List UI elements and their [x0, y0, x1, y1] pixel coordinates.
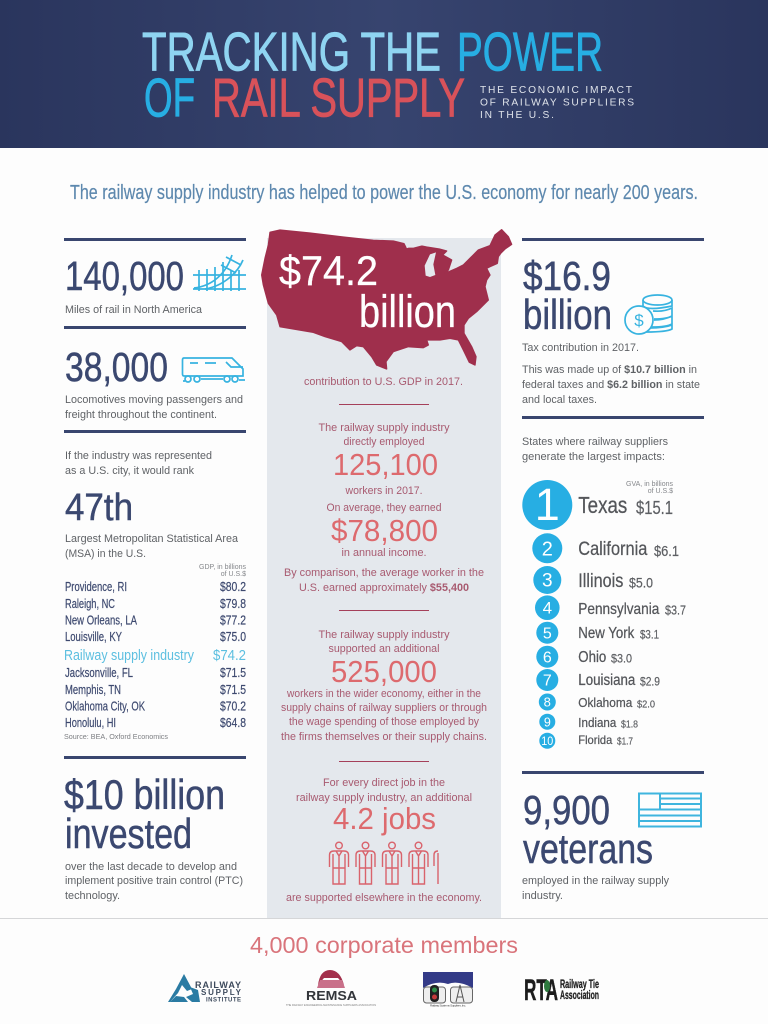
- list: top 10 states by GVA: 9: [544, 715, 551, 729]
- logo: Railway Supply Institute: SUPPLY: [201, 988, 242, 997]
- list: top 10 states by GVA: Texas: [578, 492, 627, 518]
- list: top 10 states by GVA: GVA, in billions: [626, 481, 673, 488]
- list: top 10 states by GVA: $1.8: [621, 720, 638, 730]
- stat: PTC investment: technology.: [65, 890, 120, 902]
- stat: locomotives: Locomotives moving passengers and: [65, 394, 243, 406]
- stat: miles of rail: 140,000: [65, 253, 184, 299]
- table: metro GDP ranking: Oklahoma City, OK: [65, 700, 145, 714]
- list: top 10 states by GVA: 6: [543, 649, 552, 666]
- table: metro GDP ranking: Louisville, KY: [65, 630, 122, 644]
- stat: PTC investment: [64, 771, 243, 902]
- list: top 10 states by GVA: Florida: [578, 733, 613, 747]
- table: metro GDP ranking: Raleigh, NC: [65, 597, 115, 611]
- logo: Railway Supply Institute: [168, 974, 242, 1004]
- states intro: [522, 436, 668, 463]
- stat: GDP contribution: billion: [359, 286, 456, 337]
- list: top 10 states by GVA: $3.1: [640, 628, 659, 642]
- list: top 10 states by GVA: Indiana: [578, 716, 616, 730]
- stat: PTC investment: implement positive train control (PTC): [65, 875, 243, 887]
- header banner: [0, 0, 768, 148]
- stat: jobs multiplier: railway supply industry, an additional: [296, 792, 472, 804]
- stat: indirect employment: the firms themselves or their supply chains.: [281, 731, 487, 743]
- icon: coins: [625, 295, 672, 334]
- stat: locomotives: 38,000: [65, 344, 168, 390]
- subtitle: [480, 85, 634, 121]
- list: top 10 states by GVA: $5.0: [629, 574, 653, 590]
- table: metro GDP ranking: $75.0: [220, 630, 246, 644]
- city rank text: (MSA) in the U.S.: [65, 548, 146, 560]
- table: metro GDP ranking: $77.2: [220, 614, 246, 628]
- table: metro GDP ranking: $71.5: [220, 666, 246, 680]
- table: metro GDP ranking: Railway supply industry: [64, 647, 194, 664]
- table: metro GDP ranking: Memphis, TN: [65, 683, 121, 697]
- list: top 10 states by GVA: California: [578, 539, 648, 560]
- title: POWER: [457, 22, 603, 82]
- table: metro GDP ranking: [64, 564, 246, 741]
- city rank text: [65, 450, 239, 560]
- list: top 10 states by GVA: 5: [543, 625, 552, 642]
- icon: coins: $: [634, 311, 644, 330]
- subtitle: OF RAILWAY SUPPLIERS: [480, 98, 634, 108]
- stat: jobs multiplier: 4.2 jobs: [333, 801, 436, 836]
- subtitle: THE ECONOMIC IMPACT: [480, 85, 632, 96]
- stat: direct employment: directly employed: [344, 436, 424, 448]
- logo: Railway Systems Suppliers: Railway Systems Suppliers, Inc.: [430, 1004, 466, 1008]
- stat: veterans: [522, 787, 669, 902]
- stat: tax contribution: billion: [523, 291, 612, 338]
- table: metro GDP ranking: Providence, RI: [65, 580, 127, 594]
- icon: workers: [330, 842, 438, 884]
- stat: jobs multiplier: For every direct job in the: [323, 777, 445, 789]
- footer: [0, 918, 768, 1008]
- logo: REMSA: [286, 970, 376, 1007]
- stat: direct employment: in annual income.: [342, 547, 426, 559]
- stat: indirect employment: supported an additional: [328, 643, 440, 655]
- panel: center column: [262, 230, 512, 904]
- stat: indirect employment: supply chains of railway suppliers or through: [281, 702, 487, 714]
- stat: direct employment: On average, they earned: [326, 502, 442, 514]
- stat: veterans: employed in the railway supply: [522, 875, 669, 887]
- stat: direct employment: 125,100: [333, 447, 438, 482]
- stat: PTC investment: $10 billion: [64, 771, 225, 818]
- list: top 10 states by GVA: 1: [535, 479, 560, 530]
- list: top 10 states by GVA: Oklahoma: [578, 695, 633, 710]
- stat: indirect employment: The railway supply industry: [318, 629, 450, 641]
- list: top 10 states by GVA: $2.9: [640, 674, 660, 688]
- city rank text: 47th: [65, 487, 133, 529]
- stat: PTC investment: invested: [65, 810, 192, 857]
- list: top 10 states by GVA: $2.0: [637, 698, 655, 710]
- logo: REMSA: REMSA: [306, 988, 358, 1003]
- list: top 10 states by GVA: of U.S.$: [648, 488, 673, 495]
- stat: tax contribution: [522, 253, 700, 406]
- table: metro GDP ranking: $71.5: [220, 683, 246, 697]
- stat: locomotives: freight throughout the continent.: [65, 409, 217, 421]
- list: top 10 states by GVA: 10: [541, 734, 554, 748]
- panel: right column: [522, 238, 704, 902]
- subtitle: IN THE U.S.: [480, 110, 554, 121]
- stat: indirect employment: the wage spending of those employed by: [289, 716, 480, 728]
- stat: direct employment: workers in 2017.: [345, 485, 422, 497]
- city rank text: If the industry was represented: [65, 450, 212, 462]
- list: top 10 states by GVA: Louisiana: [578, 672, 636, 689]
- map: United States: [262, 230, 512, 369]
- city rank text: as a U.S. city, it would rank: [65, 465, 194, 477]
- stat: direct employment: The railway supply industry: [318, 422, 450, 434]
- list: top 10 states by GVA: $1.7: [617, 736, 633, 748]
- title: TRACKING THE: [142, 22, 441, 82]
- table: metro GDP ranking: $80.2: [220, 580, 246, 594]
- stat: indirect employment: 525,000: [331, 654, 437, 689]
- stat: indirect employment: workers in the wider economy, either in the: [286, 688, 481, 700]
- logo: REMSA: THE RAILWAY ENGINEERING-MAINTENANCE SUPPLIERS ASSOCIATION: [286, 1004, 376, 1007]
- list: top 10 states by GVA: 7: [543, 673, 552, 690]
- list: top 10 states by GVA: Ohio: [578, 649, 606, 666]
- table: metro GDP ranking: Jacksonville, FL: [65, 666, 133, 680]
- title: OF: [144, 68, 195, 128]
- panel: left column: [64, 238, 246, 902]
- logo: Railway Systems Suppliers: [423, 972, 473, 1008]
- list: top 10 states by GVA: $6.1: [654, 544, 679, 560]
- table: metro GDP ranking: of U.S.$: [221, 571, 246, 578]
- icon: locomotive: [182, 358, 245, 382]
- list: top 10 states by GVA: $3.7: [665, 604, 686, 618]
- logo: Railway Supply Institute: RAILWAY: [195, 980, 241, 990]
- stat: veterans: veterans: [523, 825, 653, 872]
- logo: Railway Supply Institute: INSTITUTE: [206, 998, 241, 1004]
- logo: Railway Tie Association: Railway Tie: [560, 977, 599, 991]
- icon: rail tracks: [193, 255, 246, 291]
- stat: miles of rail: Miles of rail in North America: [65, 304, 203, 316]
- stat: veterans: 9,900: [523, 787, 610, 833]
- stat: GDP contribution: [279, 247, 463, 388]
- table: metro GDP ranking: $74.2: [213, 647, 246, 664]
- table: metro GDP ranking: Honolulu, HI: [65, 716, 116, 730]
- list: top 10 states by GVA: $3.0: [611, 652, 632, 666]
- stat: direct employment: $78,800: [331, 513, 438, 548]
- panel: center column background: [267, 238, 501, 918]
- title: RAIL SUPPLY: [212, 68, 465, 128]
- table: metro GDP ranking: $70.2: [220, 700, 246, 714]
- table: metro GDP ranking: GDP, in billions: [199, 564, 246, 571]
- stat: direct employment: By comparison, the average worker in the: [284, 567, 484, 579]
- stat: jobs multiplier: [286, 777, 482, 904]
- stat: GDP contribution: $74.2: [279, 247, 378, 294]
- stat: tax contribution: and local taxes.: [522, 394, 597, 406]
- list: top 10 states by GVA: 2: [542, 538, 553, 560]
- stat: GDP contribution: contribution to U.S. GDP in 2017.: [304, 376, 463, 388]
- logo: Railway Tie Association: RTA: [524, 974, 558, 1007]
- list: top 10 states by GVA: 8: [544, 695, 551, 710]
- table: metro GDP ranking: Source: BEA, Oxford Economics: [64, 732, 168, 741]
- table: metro GDP ranking: $79.8: [220, 597, 246, 611]
- stat: jobs multiplier: are supported elsewhere in the economy.: [286, 892, 482, 904]
- list: top 10 states by GVA: Illinois: [578, 571, 623, 592]
- list: top 10 states by GVA: Pennsylvania: [578, 601, 659, 618]
- list: top 10 states by GVA: 4: [543, 599, 552, 618]
- table: metro GDP ranking: $64.8: [220, 716, 246, 730]
- stat: locomotives: [65, 344, 243, 421]
- stat: veterans: industry.: [522, 890, 563, 902]
- title: [142, 22, 603, 128]
- stat: tax contribution: federal taxes and $6.2 billion in state: [522, 379, 700, 391]
- stat: tax contribution: This was made up of $10.7 billion in: [522, 364, 697, 376]
- table: metro GDP ranking: New Orleans, LA: [65, 614, 138, 628]
- icon: flag: [639, 794, 701, 826]
- city rank text: Largest Metropolitan Statistical Area: [65, 533, 239, 545]
- stat: miles of rail: [65, 253, 203, 316]
- stat: PTC investment: over the last decade to develop and: [65, 861, 237, 873]
- list: top 10 states by GVA: New York: [578, 625, 635, 642]
- list: top 10 states by GVA: $15.1: [636, 498, 673, 518]
- stat: direct employment: U.S. earned approximately $55,400: [299, 582, 469, 594]
- list: top 10 states by GVA: [522, 479, 686, 749]
- stat: direct employment: [284, 422, 484, 594]
- stat: tax contribution: $16.9: [523, 253, 611, 299]
- stat: indirect employment: [281, 629, 487, 743]
- list: top 10 states by GVA: 3: [542, 571, 553, 592]
- heading: corporate members: 4,000 corporate members: [250, 932, 518, 958]
- states intro: States where railway suppliers: [522, 436, 668, 448]
- stat: tax contribution: Tax contribution in 2017.: [522, 342, 639, 354]
- logo: Railway Tie Association: Association: [560, 988, 599, 1002]
- states intro: generate the largest impacts:: [522, 451, 665, 463]
